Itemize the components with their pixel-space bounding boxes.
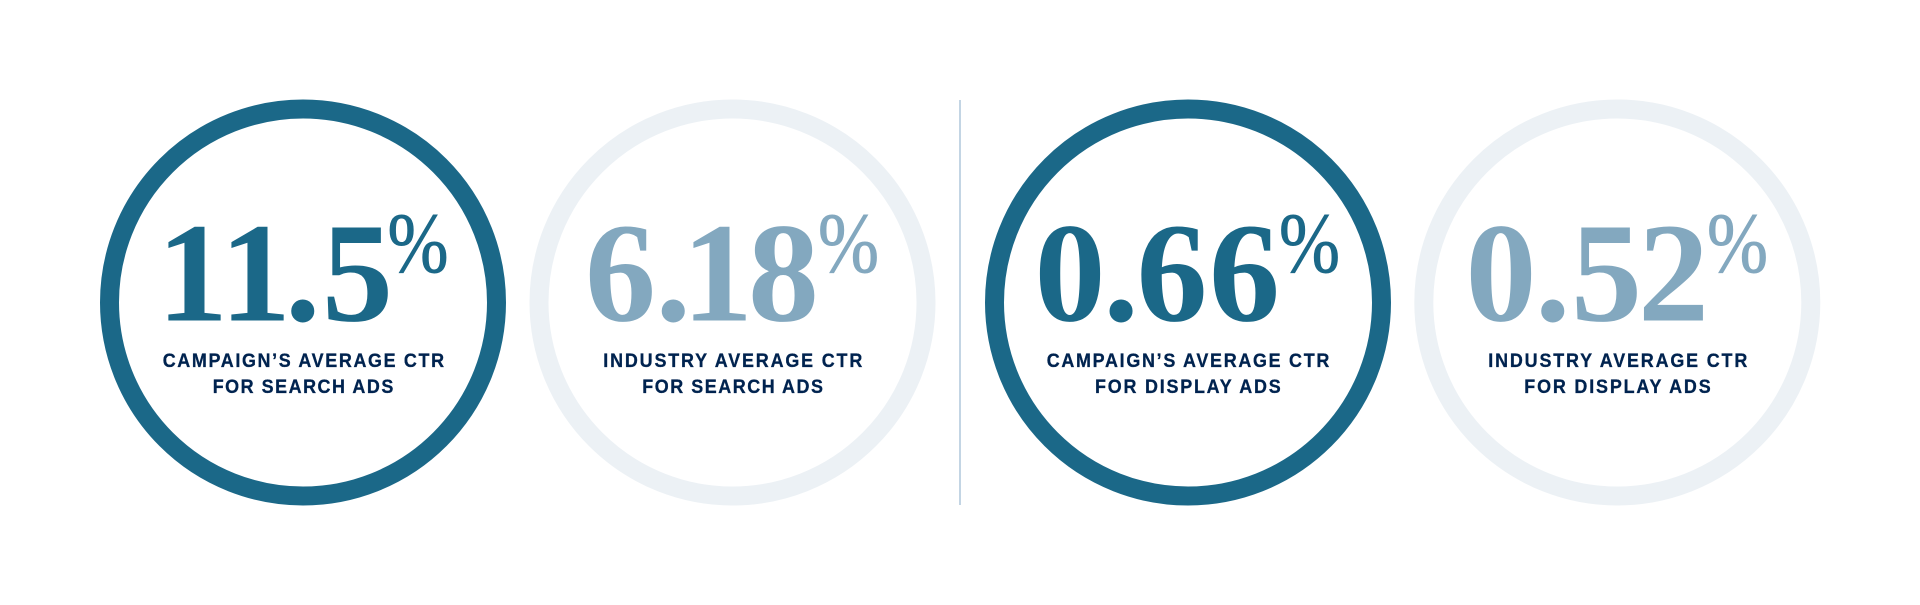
percent sign: %	[1707, 195, 1768, 291]
divider line	[959, 100, 961, 505]
label: campaign display	[1047, 349, 1330, 397]
label: industry search	[603, 349, 863, 397]
label: campaign search: CAMPAIGN’S AVERAGE CTR	[163, 349, 444, 371]
ring: campaign display	[994, 109, 1382, 496]
label: campaign display: FOR DISPLAY ADS	[1095, 375, 1281, 397]
percent sign: %	[818, 195, 879, 291]
ring: industry search	[539, 109, 926, 496]
percent sign: %	[388, 195, 448, 291]
value: 11.5: 11.5	[157, 194, 393, 352]
label: industry display: INDUSTRY AVERAGE CTR	[1488, 349, 1748, 371]
label: industry search: FOR SEARCH ADS	[642, 375, 823, 397]
value: 0.52: 0.52	[1466, 194, 1709, 352]
label: industry display	[1488, 349, 1748, 397]
value: 0.66: 0.66	[1034, 194, 1280, 352]
value: 6.18: 6.18	[585, 194, 819, 352]
label: industry search: INDUSTRY AVERAGE CTR	[603, 349, 863, 371]
panel: industry display CTR	[1424, 109, 1811, 496]
label: industry display: FOR DISPLAY ADS	[1524, 375, 1711, 397]
percent sign: %	[1279, 195, 1340, 291]
ring: campaign search	[110, 109, 496, 496]
label: campaign display: CAMPAIGN’S AVERAGE CTR	[1047, 349, 1330, 371]
panel: industry search CTR	[539, 109, 926, 496]
panel: campaign search CTR	[110, 109, 496, 496]
label: campaign search: FOR SEARCH ADS	[213, 375, 393, 397]
label: campaign search	[163, 349, 444, 397]
ring: industry display	[1424, 109, 1811, 496]
panel: campaign display CTR	[994, 109, 1382, 496]
